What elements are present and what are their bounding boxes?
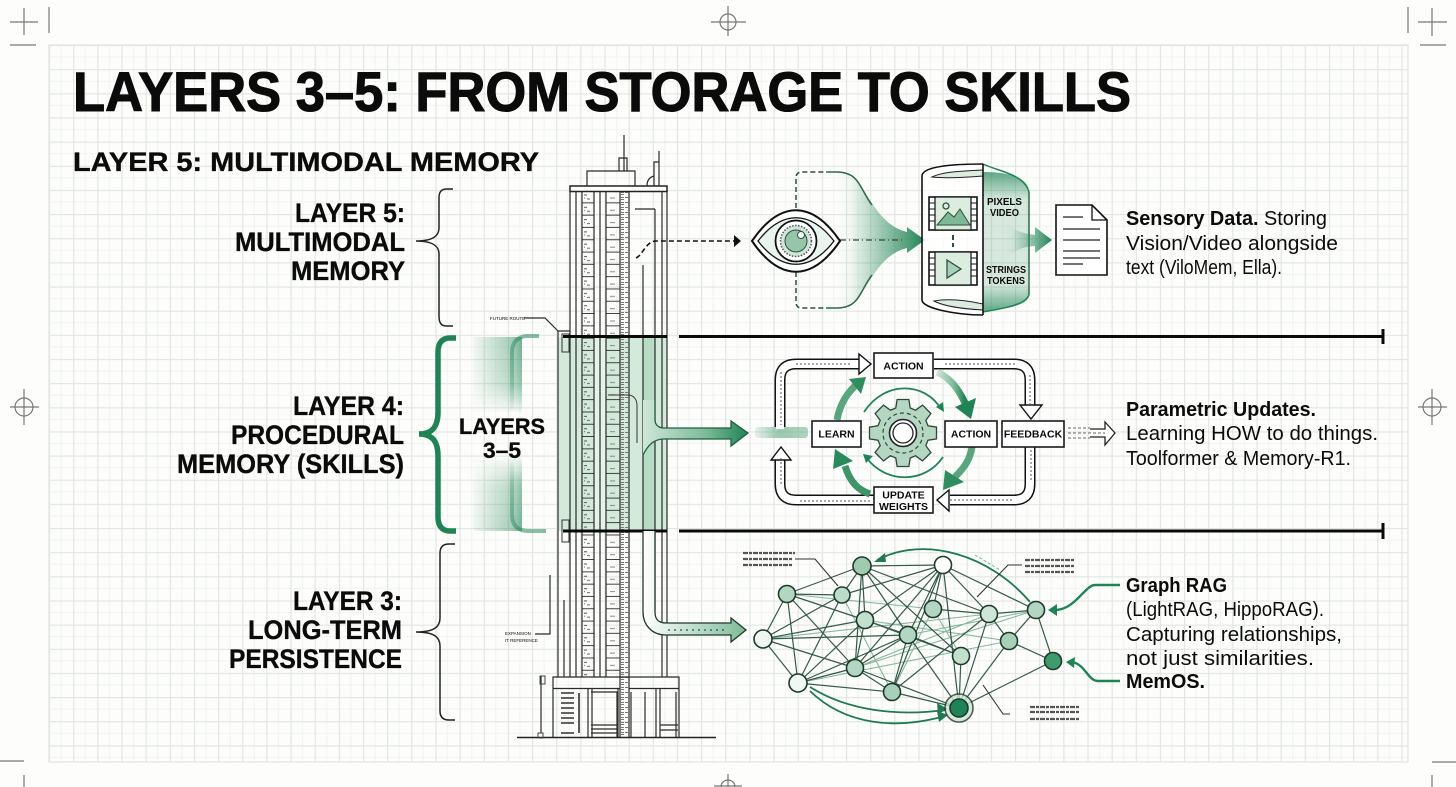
text: graph rag: Capturing relationships, (1126, 624, 1342, 646)
flow: green gradient arrow (837, 172, 925, 308)
cylinder right half green (983, 172, 1029, 312)
tower: roof and rooftop equipment (587, 135, 659, 186)
bracket: faded right side bottom (473, 458, 546, 531)
cylinder labels: PIXELS (987, 196, 1022, 208)
icon: eye with flow to storage (752, 172, 925, 308)
label: layers 3-5 (459, 414, 545, 463)
bracket: layer 4 green (419, 338, 456, 531)
subtitle: LAYER 5: MULTIMODAL MEMORY (73, 147, 539, 177)
label: layer 5 (235, 198, 405, 286)
faded entry bar (755, 427, 808, 438)
tower: base storey (553, 677, 679, 737)
tower: left annex (558, 331, 570, 677)
arrow: layer 4 from tower to loop (608, 395, 748, 455)
box: update weights: WEIGHTS (879, 501, 928, 513)
box: update weights: UPDATE (882, 490, 925, 502)
eye (752, 210, 840, 272)
cylinder labels: STRINGS (986, 264, 1026, 276)
green arrow: update weights to learn (833, 449, 870, 494)
tower blueprint (490, 135, 716, 738)
tower: small annotations: FUTURE ROUTE (490, 316, 525, 321)
box: action right: ACTION (951, 428, 991, 440)
title: LAYERS 3–5: FROM STORAGE TO SKILLS (73, 60, 1131, 123)
box: learn: LEARN (818, 428, 855, 440)
label: layer 3: LAYER 3: (293, 586, 402, 616)
graph: curved green arrows (810, 549, 1030, 723)
bracket: faded right side top (473, 336, 539, 412)
film frame: video (929, 252, 977, 285)
inner green arcs (864, 388, 941, 412)
box: learn (812, 421, 861, 447)
text: graph rag: not just similarities. (1126, 648, 1314, 670)
label: layer 4: PROCEDURAL (231, 420, 404, 450)
hollow arrow: learn side up to action (780, 354, 871, 429)
tower: green highlighted band (558, 337, 667, 531)
tower: floors middle column (606, 191, 620, 677)
text: parametric updates: Toolformer & Memory-R1. (1126, 448, 1351, 470)
icon: gear (870, 400, 936, 466)
box: update weights (874, 487, 933, 513)
hollow arrow: update weights to learn (771, 447, 876, 500)
green arrow: action to action (937, 372, 976, 419)
tower: small annotations: IT REFERENCE (505, 638, 538, 643)
tower: floors left column (582, 191, 594, 677)
label: layer 4: MEMORY (SKILLS) (177, 449, 404, 479)
hollow arrow: feedback to update weights (937, 445, 1030, 511)
hollow arrow: action to feedback (934, 364, 1042, 419)
text: sensory data: text (ViloMem, Ella). (1126, 257, 1282, 279)
text: parametric updates: Parametric Updates. (1126, 399, 1316, 421)
graph: faint green edges (763, 555, 1036, 692)
label: layer 4: LAYER 4: (293, 391, 404, 421)
arrow: callout to graph rag (1048, 585, 1120, 616)
text: sensory data (1126, 208, 1338, 279)
label: layers 3-5: LAYERS (459, 414, 545, 439)
text: parametric updates: Learning HOW to do things. (1126, 423, 1378, 445)
film frame: image (929, 197, 977, 230)
arrow: layer 3 from tower to graph (643, 531, 746, 642)
box: feedback (1002, 421, 1064, 447)
graph: small annotations (743, 553, 1080, 719)
graph: nodes (945, 694, 973, 722)
box: action top (874, 353, 933, 378)
label: layer 5: MULTIMODAL (235, 227, 405, 257)
text: sensory data: Sensory Data. Storing (1126, 208, 1327, 230)
green arrow: learn to action (837, 377, 866, 420)
diagram: knowledge graph (743, 549, 1120, 723)
tower: structural verticals (570, 191, 667, 737)
cylinder labels (986, 196, 1026, 287)
text: graph rag: Graph RAG (1126, 575, 1227, 597)
divider: lower layer line (563, 523, 1383, 539)
tower: small annotations: EXPANSION (505, 631, 531, 636)
box: action top: ACTION (883, 360, 924, 372)
label: layer 4 (177, 391, 404, 479)
label: layer 5: LAYER 5: (295, 198, 405, 228)
box: action right (945, 421, 997, 447)
cylinder left half outline (922, 164, 983, 315)
flow arrow to document (1006, 220, 1052, 260)
text: graph rag: MemOS. (1126, 671, 1205, 693)
cylinder labels: VIDEO (990, 207, 1019, 219)
green arrow: action to update weights (943, 447, 972, 490)
arrow: dashed from tower to eye (636, 235, 741, 258)
bracket: layer 3 (416, 544, 455, 720)
label: layer 3: LONG-TERM (248, 615, 402, 645)
tower: small annotations (490, 316, 569, 738)
label: layer 3: PERSISTENCE (229, 644, 402, 674)
icon: document (1056, 205, 1107, 275)
icon: storage cylinder (922, 164, 1052, 315)
label: layers 3-5: 3–5 (483, 438, 521, 463)
diagram: learning loop (755, 353, 1115, 513)
tower: ground line (517, 736, 716, 738)
label: layer 3 (229, 586, 402, 674)
text: graph rag (1126, 575, 1342, 693)
text: sensory data: Vision/Video alongside (1126, 233, 1338, 255)
text: graph rag: (LightRAG, HippoRAG). (1126, 599, 1324, 621)
arrow: callout to memos (1066, 657, 1120, 681)
tower: service shaft hatch (620, 191, 629, 737)
graph: dark edges (763, 565, 1053, 708)
label: layer 5: MEMORY (291, 256, 405, 286)
hollow arrow: exit (1068, 422, 1115, 445)
cylinder labels: TOKENS (987, 275, 1025, 287)
text: parametric updates (1126, 399, 1378, 470)
box: feedback: FEEDBACK (1004, 428, 1063, 440)
divider: top layer line (563, 329, 1383, 344)
bracket: layer 5 (416, 189, 453, 326)
